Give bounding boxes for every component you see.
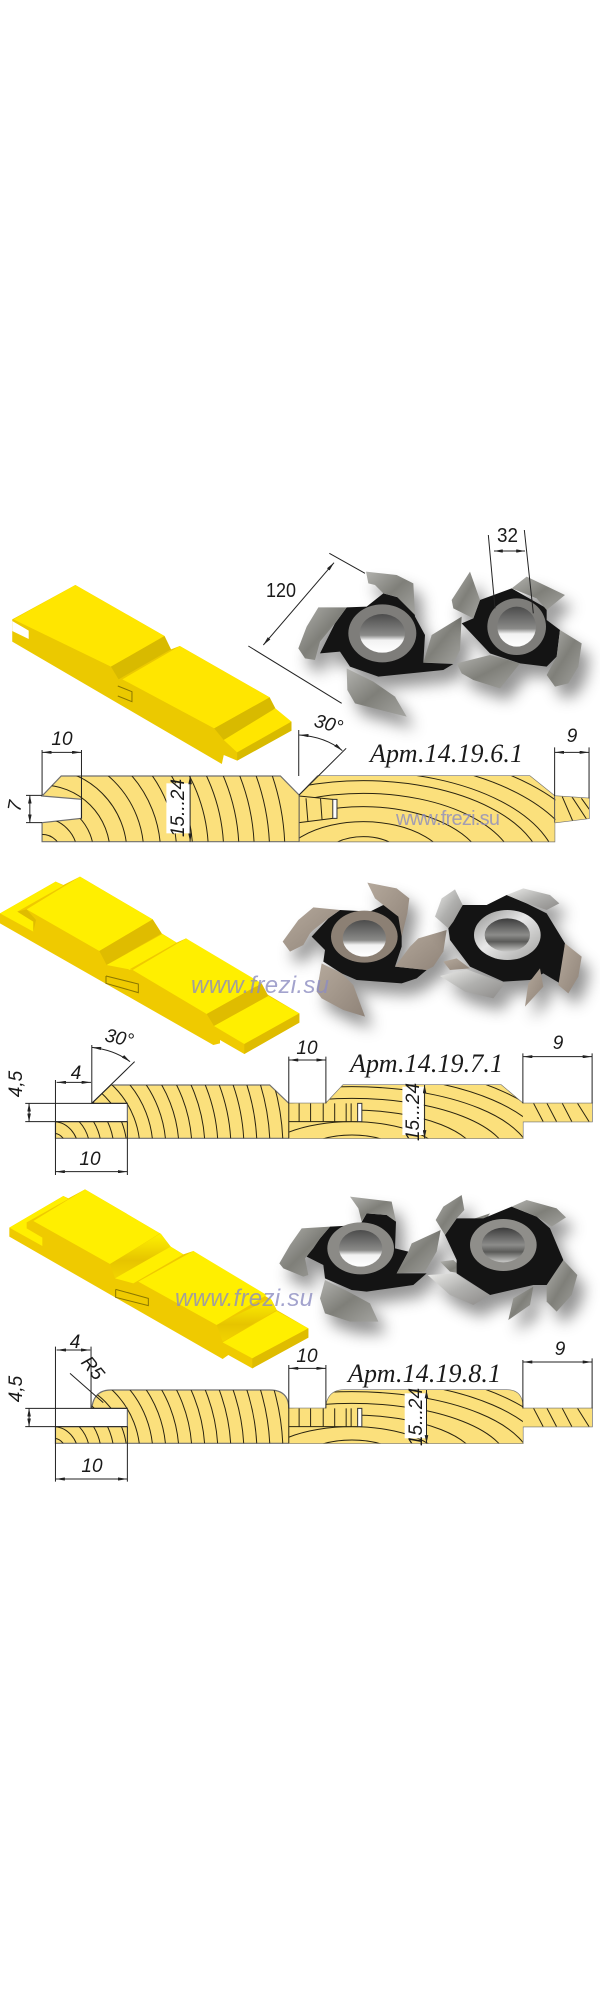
cutter right 2 [435, 888, 582, 1007]
watermark 3: www.frezi.su [175, 1285, 313, 1312]
article number 3: Арт.14.19.8.1 [346, 1359, 501, 1388]
cutter right 3 [428, 1195, 577, 1320]
cross-section drawing 2 [25, 1045, 593, 1175]
cutter dimension labels: 32 [497, 525, 518, 547]
dimension labels 2 [6, 1025, 564, 1170]
dimension labels 3: 9 [555, 1339, 566, 1360]
panel: profile 14.19.7.1 [0, 876, 598, 1175]
dimension labels 1: 10 [51, 729, 73, 750]
cutter left 2 [283, 883, 447, 1017]
isometric board 1 [12, 585, 291, 764]
dimension labels 1: 7 [4, 798, 27, 813]
dimension labels 2: 10 [79, 1149, 101, 1170]
dimension labels 2: 10 [296, 1038, 318, 1059]
dimension labels 3: 15...24 [406, 1388, 427, 1446]
article number 1: Арт.14.19.6.1 [368, 739, 523, 768]
dimension labels 3: 10 [296, 1346, 318, 1367]
dimension labels 1: 15...24 [168, 779, 189, 837]
panel: profile 14.19.8.1 [8, 1189, 593, 1482]
watermark 1: www.frezi.su [395, 808, 500, 830]
dimension labels 1 [4, 711, 578, 837]
cutter dimension labels: 120 [266, 580, 296, 602]
cross-section drawing 1 [26, 730, 590, 842]
isometric board 2 [0, 877, 299, 1054]
isometric board 3 [9, 1189, 308, 1368]
cutter left 3 [279, 1197, 441, 1322]
dimension labels 2: 4,5 [6, 1070, 27, 1097]
dimension labels 2: 9 [553, 1033, 564, 1054]
dimension labels 2: 15...24 [403, 1083, 424, 1141]
watermark 2: www.frezi.su [191, 972, 329, 999]
dimension labels 3: 10 [81, 1456, 103, 1477]
cutter with 32 dimension [452, 530, 582, 688]
dimension labels 3: 4,5 [6, 1375, 27, 1402]
dimension labels 1: 30° [312, 711, 345, 739]
cutter dimension labels [266, 525, 518, 602]
cutter with 120 dimension [248, 553, 462, 717]
dimension labels 2: 4 [71, 1063, 81, 1084]
dimension labels 3 [6, 1332, 566, 1477]
dimension labels 3: 4 [70, 1332, 80, 1353]
dimension labels 1: 9 [567, 726, 578, 747]
article number 2: Арт.14.19.7.1 [348, 1049, 503, 1078]
cross-section drawing 3 [25, 1346, 593, 1482]
dimension labels 3: R5 [76, 1352, 108, 1385]
panel: profile 14.19.6.1 [8, 528, 598, 842]
dimension labels 2: 30° [103, 1025, 136, 1052]
